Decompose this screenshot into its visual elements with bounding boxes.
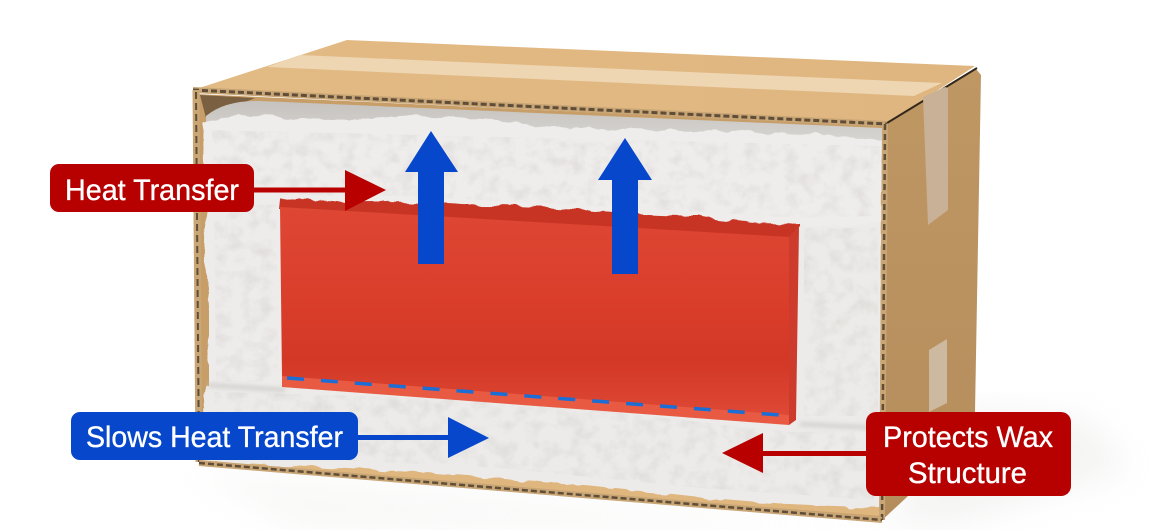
- insulation: left column: [205, 200, 285, 392]
- insulation: rear top shade: [206, 101, 882, 170]
- insulation: bottom layer: [204, 384, 882, 508]
- floor shadow: [190, 405, 1130, 530]
- corrugated edges: [193, 90, 887, 520]
- Protects Wax Structure text: [883, 421, 1053, 490]
- corrugated top edge: [193, 90, 887, 124]
- Slows Heat Transfer arrow: [354, 417, 489, 458]
- corrugated right edge: [882, 124, 885, 520]
- top seam: [887, 68, 977, 123]
- Slows Heat Transfer label box: [71, 412, 358, 460]
- lower tape on right side: [929, 339, 947, 412]
- Heat Transfer arrow: [250, 170, 386, 211]
- wax block bottom edge: [282, 376, 789, 425]
- insulation: base fill: [209, 135, 881, 506]
- insulation: top layer texture: [212, 130, 880, 218]
- wax block right face: [789, 226, 799, 425]
- insulation texture: [214, 205, 878, 500]
- interior dark corner: [200, 95, 255, 118]
- Protects Wax Structure arrow: [722, 433, 870, 473]
- box top flap: [193, 40, 975, 123]
- wax block top face: [279, 190, 800, 238]
- insulation: right column: [796, 215, 880, 420]
- wax block: [279, 190, 800, 425]
- Protects Wax Structure text: Structure: [908, 457, 1027, 490]
- box interior: [196, 94, 886, 518]
- callout: Heat Transfer: [50, 164, 386, 212]
- layer seam shadow: [208, 385, 880, 428]
- dashed blue line: [287, 378, 780, 415]
- Protects Wax Structure label box: [866, 412, 1071, 496]
- Heat Transfer label box: [50, 164, 254, 212]
- box right side: [880, 69, 981, 522]
- cardboard box: [193, 40, 981, 522]
- tape on right side: [923, 87, 948, 225]
- insulation: top layer: [203, 116, 882, 226]
- corrugated bottom edge: [199, 463, 882, 520]
- callout: Slows Heat Transfer: [71, 412, 489, 460]
- blue arrow up: right: [598, 138, 652, 274]
- Protects Wax Structure text: Protects Wax: [883, 421, 1053, 454]
- Slows Heat Transfer text: Slows Heat Transfer: [86, 421, 343, 454]
- Heat Transfer text: Heat Transfer: [65, 174, 239, 207]
- corrugated left edge: [196, 90, 199, 462]
- bottom interior floor: [204, 452, 880, 516]
- callout: Protects Wax Structure: [722, 412, 1071, 496]
- wax block front face: [280, 207, 789, 417]
- packing tape on top: [267, 55, 942, 96]
- blue arrow up: left: [405, 131, 458, 264]
